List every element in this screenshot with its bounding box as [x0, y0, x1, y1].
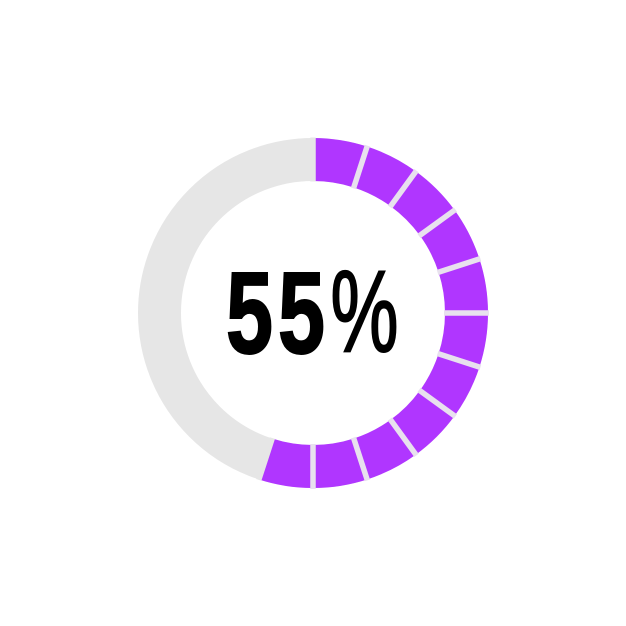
grey end gaps of the progress arc — [259, 138, 313, 480]
percentage label — [226, 246, 398, 378]
background ring — [160, 160, 466, 466]
percentage label: % — [330, 246, 398, 376]
percentage label: 5 — [226, 248, 273, 378]
progress segments — [266, 160, 466, 466]
segment separators — [313, 146, 489, 489]
percentage label: 5 — [278, 248, 325, 378]
